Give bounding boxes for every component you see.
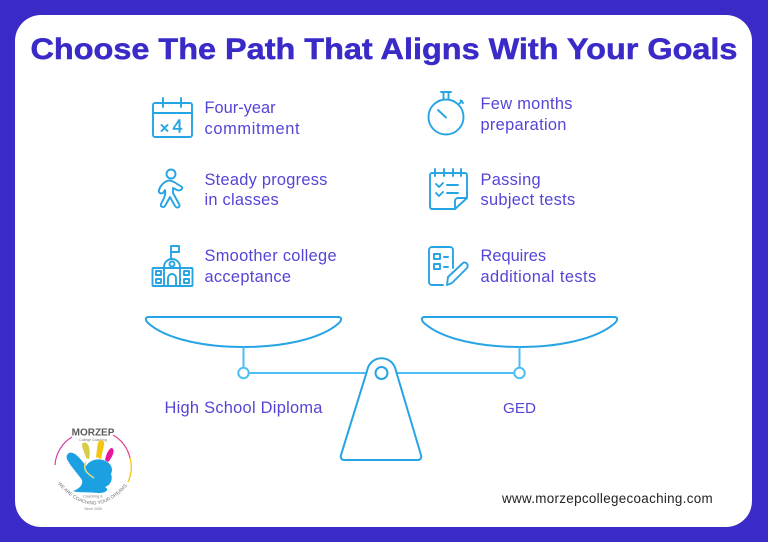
logo: Morzep: WE ARE COACHING YOUR DREAMS bbox=[58, 482, 127, 504]
label: GED: GED bbox=[503, 400, 536, 417]
text: requires additional tests: Requires bbox=[480, 247, 546, 265]
text: passing subject tests bbox=[480, 170, 576, 209]
text: steady progress: Steady progress bbox=[204, 170, 328, 188]
text: requires additional tests bbox=[480, 247, 597, 286]
logo: Morzep: MORZEP bbox=[72, 428, 115, 438]
text: requires additional tests: additional tests bbox=[480, 268, 597, 286]
title: Choose The Path That Aligns With Your Goals bbox=[31, 33, 737, 66]
text: few months preparation bbox=[480, 95, 573, 134]
text: passing subject tests: subject tests bbox=[480, 191, 576, 209]
text: smoother college acceptance bbox=[204, 247, 337, 286]
text: few months preparation: Few months bbox=[480, 95, 573, 113]
text: steady progress bbox=[204, 170, 328, 209]
text: smoother college acceptance: Smoother college bbox=[204, 247, 337, 265]
text: few months preparation: preparation bbox=[480, 116, 567, 134]
website url: www.morzepcollegecoaching.com bbox=[502, 491, 713, 506]
text: four-year commitment bbox=[204, 99, 300, 138]
beam and stems bbox=[244, 348, 520, 373]
text: four-year commitment: Four-year bbox=[204, 99, 276, 117]
logo: Morzep: College Coaching bbox=[79, 438, 107, 442]
text: smoother college acceptance: acceptance bbox=[204, 268, 291, 286]
text: steady progress: in classes bbox=[204, 191, 279, 209]
logo: Morzep: Since 2008 bbox=[84, 507, 102, 511]
logo: Morzep: Coaching & bbox=[83, 494, 103, 498]
text: four-year commitment: commitment bbox=[204, 120, 300, 138]
text: passing subject tests: Passing bbox=[480, 170, 541, 188]
left pivot bbox=[238, 368, 249, 378]
center pivot bbox=[376, 367, 388, 379]
right pivot bbox=[514, 368, 525, 378]
icon: calendar x4: 4 bbox=[172, 116, 183, 136]
right pan bbox=[422, 317, 617, 347]
label: high school diploma: High School Diploma bbox=[164, 399, 323, 417]
fulcrum bbox=[341, 358, 421, 460]
left pan bbox=[146, 317, 341, 347]
